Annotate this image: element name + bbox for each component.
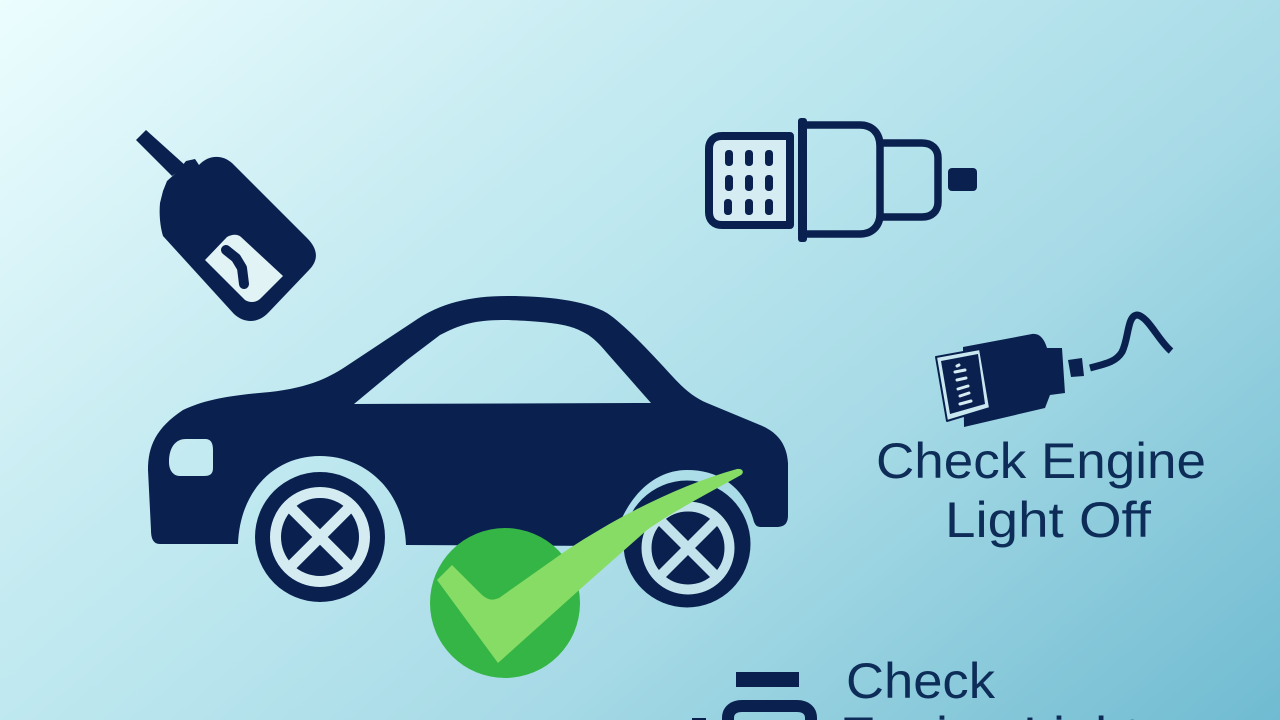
car silhouette	[148, 296, 788, 546]
green check mark badge	[430, 469, 743, 678]
front wheel	[255, 472, 385, 602]
icon: diagnostic connector outline	[709, 118, 977, 242]
label: check engine light off: Light Off	[945, 492, 1151, 548]
label: check engine light (cropped)	[840, 653, 1140, 720]
rear wheel	[624, 480, 750, 608]
icon: engine light symbol (cropped)	[692, 672, 811, 720]
icon: OBD plug with cable	[936, 315, 1171, 427]
label: check engine light off	[876, 433, 1206, 548]
label: check engine light off: Check Engine	[876, 433, 1206, 489]
label: check engine light (cropped): Check	[846, 653, 996, 709]
icon: handheld scan tool	[136, 130, 316, 321]
